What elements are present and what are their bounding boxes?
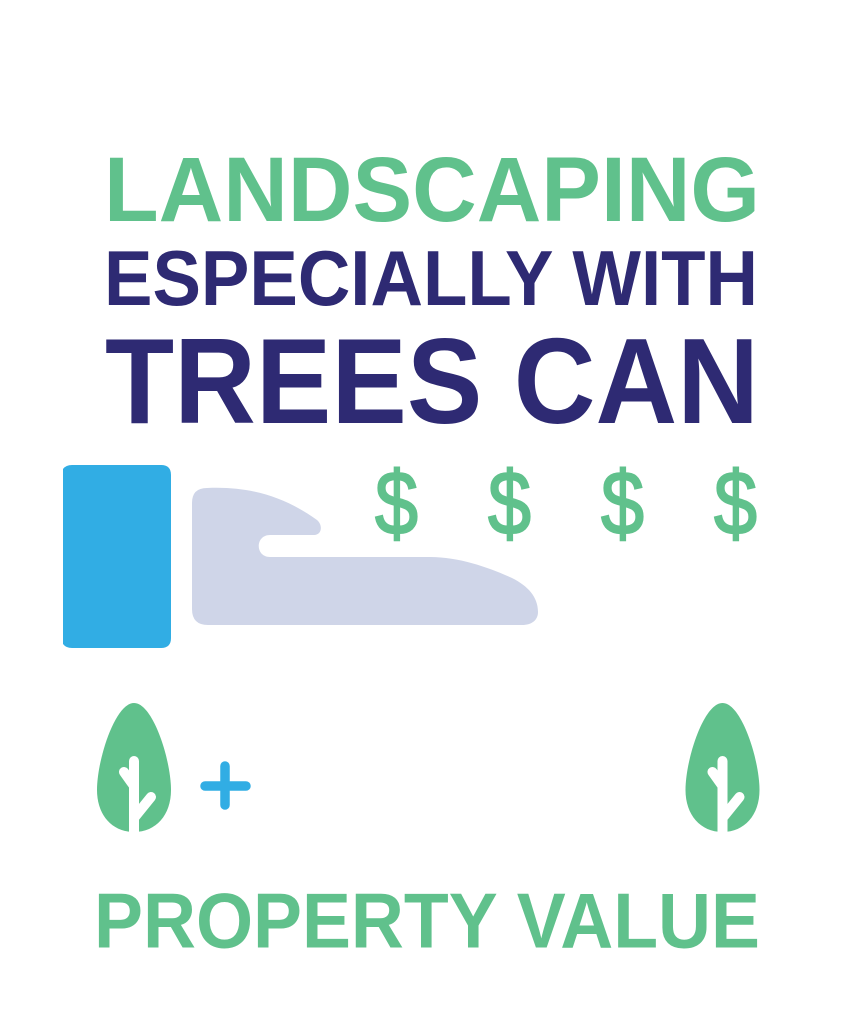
right tree trunk (712, 761, 740, 848)
dollar sign 3: $ (601, 454, 644, 554)
left tree crown (97, 703, 171, 832)
icon: right tree (686, 703, 760, 848)
heading: landscaping especially with trees can (104, 139, 760, 449)
icon: hand holding money (63, 465, 538, 648)
hand (192, 488, 538, 625)
icon: dollar signs (375, 454, 757, 554)
heading line: LANDSCAPING: LANDSCAPING (104, 139, 760, 241)
dollar sign 2: $ (488, 454, 531, 554)
right tree crown (686, 703, 760, 832)
dollar sign 4: $ (714, 454, 757, 554)
white figure: 20%: 20% (268, 672, 650, 884)
dollar sign 1: $ (375, 454, 418, 554)
heading line: TREES CAN: TREES CAN (105, 313, 759, 449)
caption: PROPERTY VALUE: PROPERTY VALUE (94, 876, 760, 964)
heading line: ESPECIALLY WITH: ESPECIALLY WITH (104, 234, 758, 322)
icon: left tree (97, 703, 171, 848)
hand cuff (63, 465, 171, 648)
left tree trunk (124, 761, 151, 848)
icon: plus sign (205, 766, 246, 805)
